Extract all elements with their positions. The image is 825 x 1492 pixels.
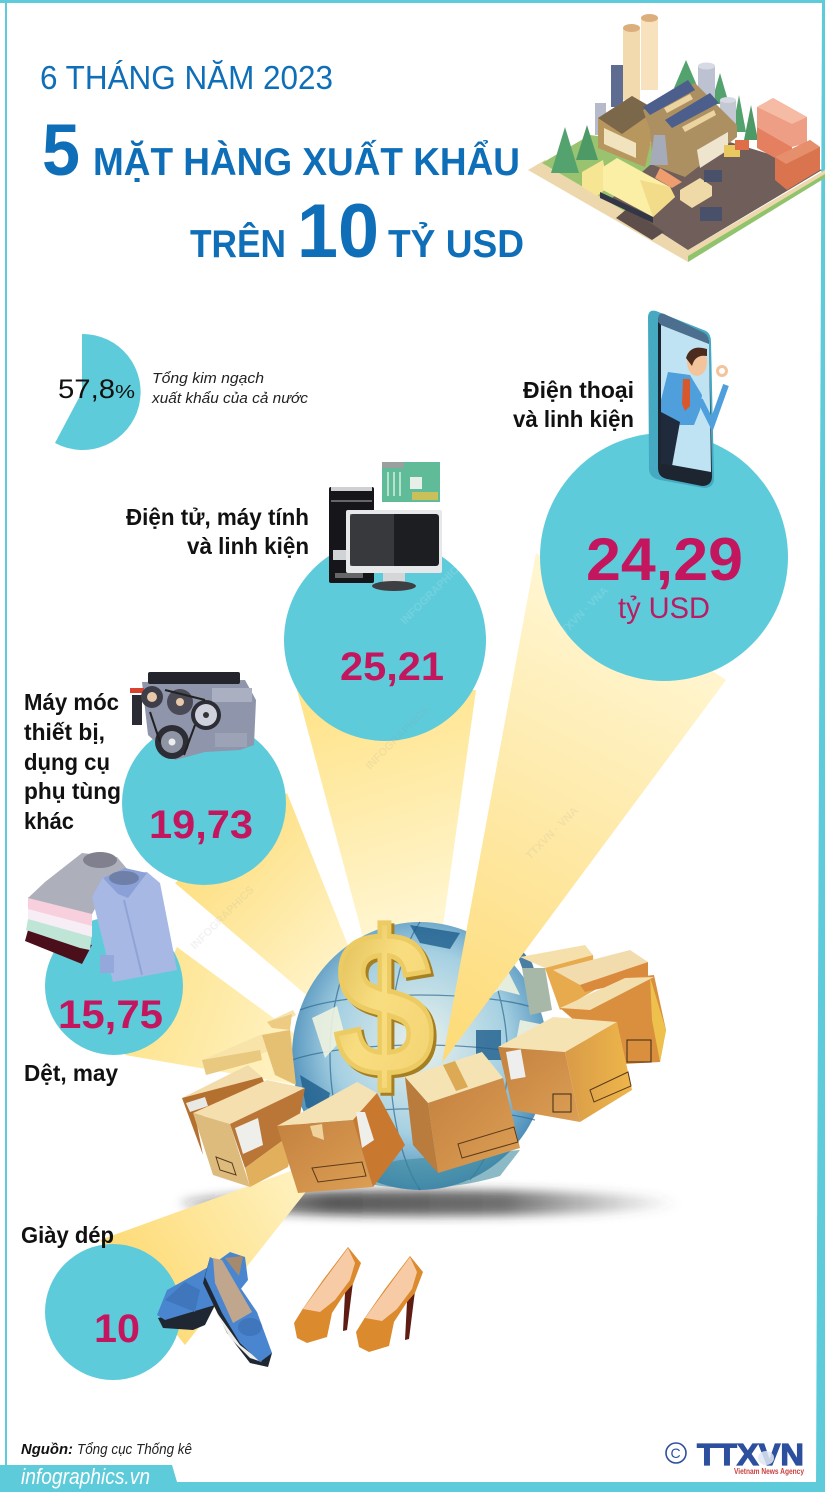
pie caption: [151, 370, 309, 407]
factory containers: [757, 98, 820, 190]
box: far left: [182, 1065, 264, 1155]
box: front centre: [405, 1052, 520, 1173]
pie sector 57.8%: [55, 334, 141, 450]
watermarks: [189, 559, 611, 952]
ground shadow: [180, 1190, 680, 1216]
circle: [122, 721, 286, 885]
beam: phones: [442, 553, 726, 1063]
circle: [284, 539, 486, 741]
logo: TTXVN: Vietnam News Agency: [734, 1467, 804, 1476]
circle: [540, 433, 788, 681]
value: 25,21: [340, 645, 444, 689]
factory truck: [582, 158, 675, 223]
label: Dệt, may: [24, 1060, 118, 1086]
source note: Nguồn:: [21, 1441, 73, 1458]
watermarks: TTXVN · VNA: [524, 805, 581, 862]
light beam: footwear: [100, 1155, 335, 1345]
pie: share of national exports: [55, 334, 309, 450]
dollar sign: $: [334, 890, 434, 1119]
heading line 1: 5: [42, 110, 80, 191]
icon: blue loafers: [157, 1252, 272, 1367]
logo: TTXVN: TTXVN: [697, 1437, 804, 1472]
value: 15,75: [58, 993, 163, 1037]
source note: Tổng cục Thống kê: [77, 1441, 192, 1458]
factory buildings: [598, 80, 737, 177]
heading line 2: TỶ USD: [388, 222, 524, 266]
heading line 2: TRÊN: [190, 222, 286, 266]
heading line 2: [190, 189, 524, 274]
value: 19,73: [149, 803, 253, 847]
subtitle: period: 6 THÁNG NĂM 2023: [40, 59, 333, 96]
panel: machinery: [24, 672, 286, 885]
label: khác: [24, 808, 74, 834]
heel shoe 2: [356, 1256, 423, 1352]
box: back right 1: [520, 945, 595, 1015]
logo: TTXVN: [666, 1437, 804, 1476]
value: 24,29: [586, 526, 743, 593]
illustration: isometric factory: [528, 14, 825, 262]
label: phụ tùng: [24, 778, 121, 804]
factory chimneys: [611, 14, 658, 107]
pie value: 57,8: [58, 374, 115, 404]
icon: computer and circuit board: [329, 462, 442, 591]
icon: orange high heels: [294, 1247, 423, 1352]
box: small back left: [267, 1010, 296, 1030]
box: back right 2: [553, 950, 648, 992]
illustration: globe with boxes and dollar sign: [182, 553, 726, 1193]
label: Điện thoại: [523, 377, 634, 403]
light beam: textiles: [125, 947, 385, 1100]
right shoe: [203, 1257, 272, 1367]
label: và linh kiện: [187, 533, 309, 559]
unit: tỷ USD: [618, 592, 710, 625]
factory cargo and forklifts: [655, 140, 749, 221]
heading line 1: [42, 110, 520, 191]
heading line 1: MẶT HÀNG XUẤT KHẨU: [93, 139, 520, 184]
icon: engine: [130, 672, 256, 760]
logo: TTXVN: C: [670, 1445, 681, 1461]
website footer: infographics.vn: [21, 1464, 150, 1489]
panel: phones: [513, 311, 788, 681]
light beam: electronics: [297, 690, 476, 1076]
heel shoe 1: [294, 1247, 361, 1343]
circle: [45, 1244, 181, 1380]
panel: footwear: [21, 1222, 423, 1380]
label: Điện tử, máy tính: [126, 504, 309, 530]
title: [40, 59, 524, 274]
label: [126, 504, 309, 559]
box: back left: [202, 1030, 296, 1085]
watermarks: INFOGRAPHICS: [399, 559, 467, 627]
factory tanks: [595, 62, 736, 135]
pie value: [58, 374, 135, 404]
factory trees: [551, 60, 758, 173]
left shoe: [157, 1252, 248, 1330]
box: right: [560, 975, 666, 1064]
circle: [45, 917, 183, 1055]
icon: smartphone with man: [648, 311, 726, 488]
box: front centre left: [277, 1082, 405, 1193]
watermarks: INFOGRAPHICS: [364, 704, 432, 772]
label: [513, 377, 634, 432]
globe: [292, 922, 548, 1190]
box: front right: [498, 1017, 632, 1122]
pie caption: Tổng kim ngạch: [152, 370, 264, 387]
panel: electronics and computers: [126, 462, 486, 741]
label: [24, 689, 121, 834]
label: dụng cụ: [24, 749, 110, 775]
heading line 2: 10: [297, 189, 379, 274]
value: 10: [94, 1307, 140, 1351]
label: và linh kiện: [513, 406, 634, 432]
source note: [21, 1441, 192, 1458]
watermarks: INFOGRAPHICS: [189, 884, 257, 952]
pie value: %: [115, 382, 135, 402]
box: front left: [193, 1080, 305, 1187]
watermarks: TTXVN · VNA: [554, 585, 611, 642]
label: Giày dép: [21, 1222, 114, 1248]
pie caption: xuất khẩu của cả nước: [151, 390, 309, 407]
light beam: machinery: [175, 793, 400, 1075]
label: Máy móc: [24, 689, 119, 715]
dollar sign: $: [337, 893, 437, 1122]
panel: textiles: [24, 852, 183, 1086]
label: thiết bị,: [24, 719, 105, 745]
icon: folded shirts: [25, 852, 177, 982]
